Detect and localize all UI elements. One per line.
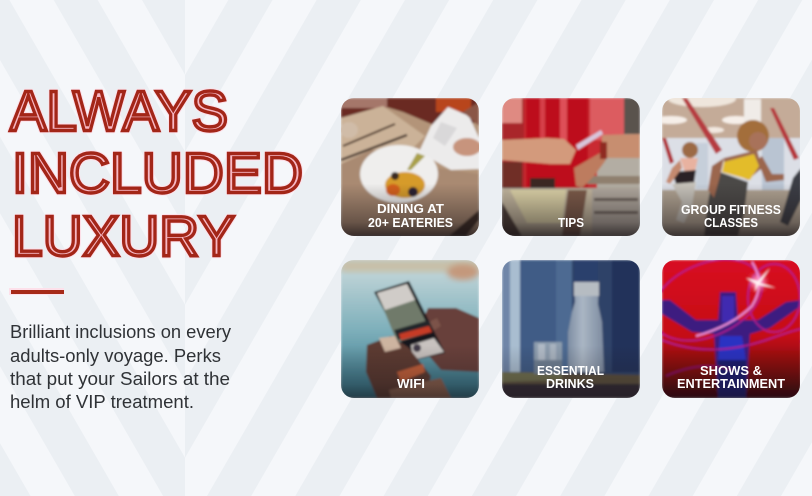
photo: performer with light hoops — [662, 260, 800, 398]
title: LUXURY — [12, 204, 235, 268]
title: ALWAYS — [10, 80, 228, 144]
label: dining: DINING AT — [377, 201, 444, 216]
label: tips: TIPS — [558, 215, 584, 230]
intro paragraph — [10, 322, 231, 412]
photo: phone held over pool — [341, 260, 479, 398]
label: group fitness: GROUP FITNESS — [681, 202, 781, 217]
label: group fitness — [681, 202, 781, 230]
title: LUXURY — [12, 204, 235, 268]
label: shows and entertainment: ENTERTAINMENT — [677, 376, 785, 391]
title: INCLUDED — [12, 142, 303, 206]
label: essential drinks: DRINKS — [546, 376, 594, 391]
intro paragraph: helm of VIP treatment. — [10, 392, 194, 412]
label: shows and entertainment: SHOWS & — [700, 363, 762, 378]
label: essential drinks: ESSENTIAL — [537, 363, 604, 378]
intro paragraph: adults-only voyage. Perks — [10, 346, 221, 366]
card: dining — [340, 98, 481, 236]
card: essential drinks — [502, 260, 640, 398]
title: ALWAYS — [10, 80, 228, 144]
label: dining — [368, 201, 453, 230]
label: group fitness: CLASSES — [704, 215, 758, 230]
label: shows and entertainment — [677, 363, 785, 391]
photo: plated dish and napkin — [340, 98, 481, 236]
photo: hands exchanging tip over red apron — [502, 98, 640, 236]
title rule — [9, 288, 64, 295]
label: wifi: WIFI — [397, 376, 425, 391]
card: group fitness — [662, 98, 800, 236]
card: wifi — [341, 260, 479, 398]
intro paragraph: Brilliant inclusions on every — [10, 322, 231, 342]
title: INCLUDED — [12, 142, 303, 206]
photo: water carafe and glass — [502, 260, 640, 398]
title — [10, 80, 303, 268]
label: dining: 20+ EATERIES — [368, 215, 453, 230]
card: tips — [502, 98, 640, 236]
intro paragraph: that put your Sailors at the — [10, 369, 230, 389]
photo: suspension fitness class — [662, 98, 800, 236]
card: shows and entertainment — [662, 260, 800, 398]
label: essential drinks — [537, 363, 604, 391]
